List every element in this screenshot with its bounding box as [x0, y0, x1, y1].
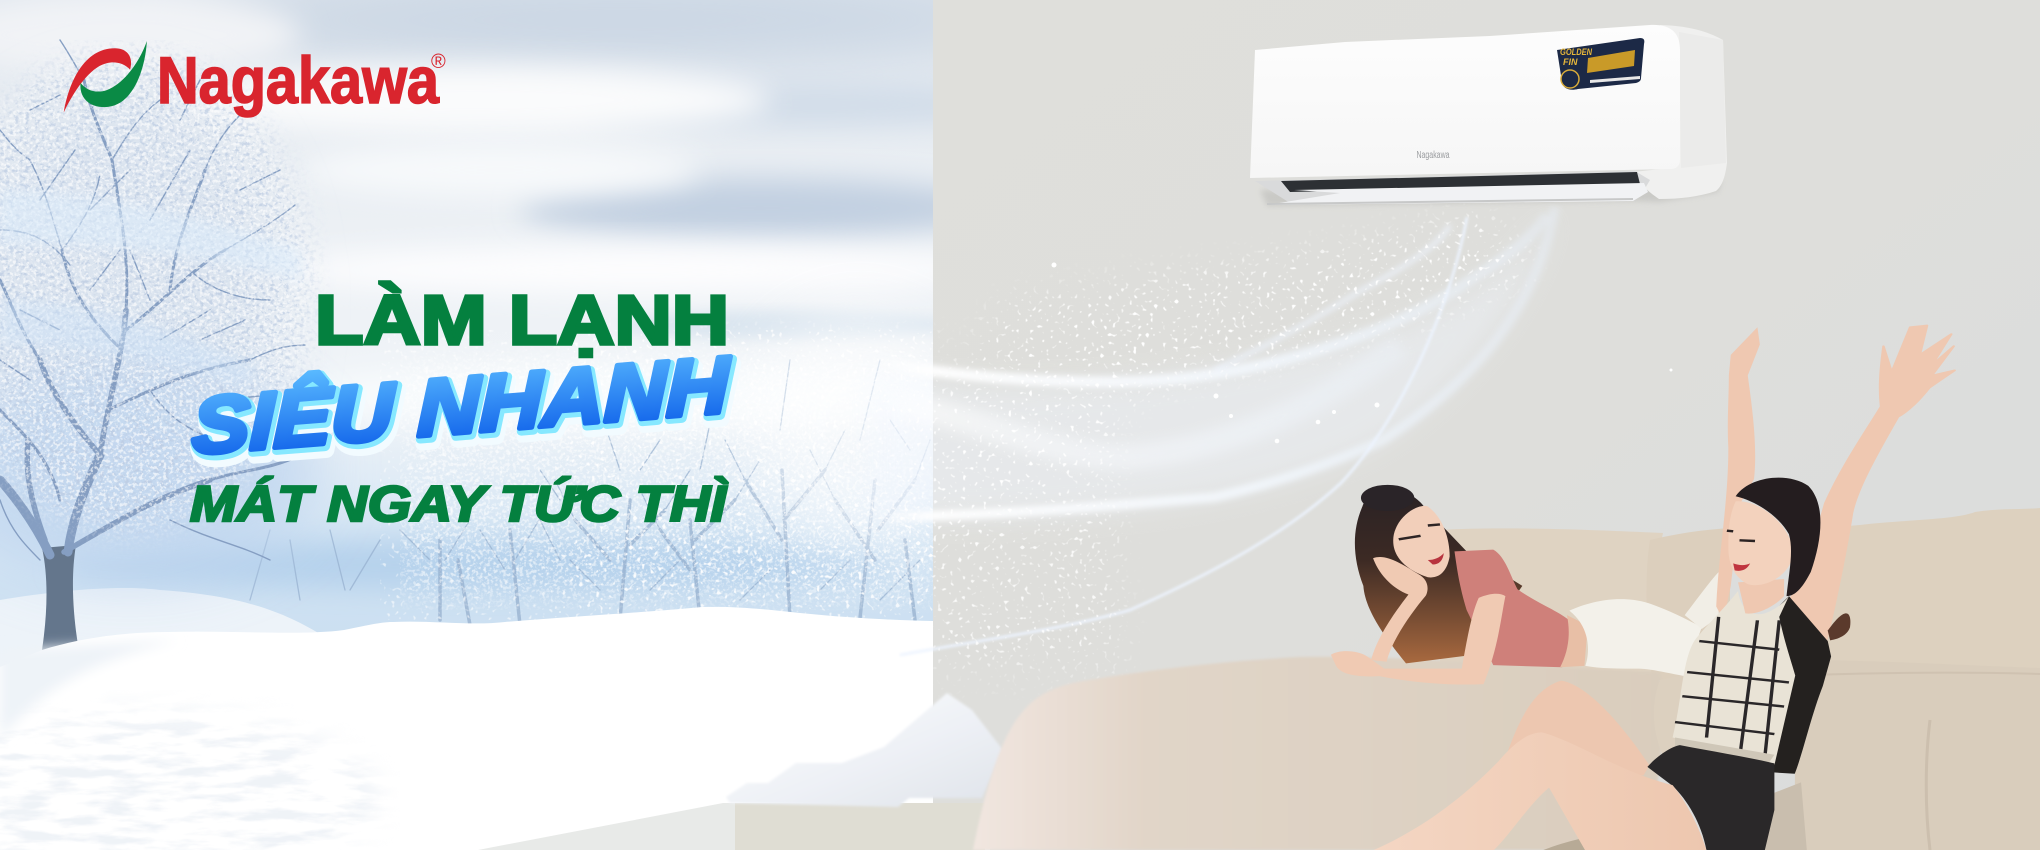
headline line 2: SIÊU NHANH — [192, 338, 731, 471]
logo wordmark: Nagakawa — [157, 43, 440, 117]
long hair — [1355, 490, 1522, 663]
clouds — [0, 0, 1060, 591]
pink shirt — [1454, 550, 1570, 667]
far tree frost — [400, 340, 933, 610]
face — [1393, 506, 1450, 577]
distant trees — [250, 360, 930, 625]
panel: living room wall — [933, 0, 2040, 850]
ac front panel — [1250, 25, 1680, 178]
sofa inner seat — [1654, 672, 1700, 790]
hair — [1736, 478, 1820, 596]
lower arm — [1331, 594, 1505, 685]
soft band between streams — [870, 207, 1555, 518]
golden fin sticker: FIN — [1563, 57, 1578, 67]
rear leg — [1505, 681, 1649, 789]
check lines — [1675, 617, 1789, 758]
headline line 3: MÁT NGAY TỨC THÌ — [190, 476, 728, 532]
golden fin sticker — [1557, 38, 1644, 90]
headline line 2: SIÊU NHANH — [196, 346, 735, 479]
snow particles — [560, 212, 1672, 679]
black back of top — [1765, 596, 1831, 774]
falling snow — [380, 330, 933, 620]
left arm — [1716, 327, 1760, 620]
neck — [1738, 579, 1784, 614]
air conditioner — [1250, 25, 1727, 206]
air flow swooshes — [870, 207, 1555, 655]
sofa back left — [1440, 528, 1663, 680]
ac brand: Nagakawa — [1416, 150, 1450, 161]
waistband — [1675, 738, 1774, 765]
rear snow bank — [0, 588, 317, 667]
front leg — [1372, 732, 1707, 850]
ac louver and vent — [1255, 171, 1650, 203]
panel: winter scene — [0, 0, 933, 850]
headline — [190, 281, 735, 532]
ac side and base — [1633, 25, 1727, 199]
registered mark: ® — [431, 51, 446, 73]
logo — [64, 41, 446, 117]
snow pile — [726, 693, 1003, 807]
hair bun — [1361, 485, 1414, 511]
sofa back middle — [1646, 528, 1730, 680]
right arm — [1784, 326, 1955, 662]
haze from airflow — [750, 310, 970, 550]
golden fin sticker: GOLDEN — [1560, 47, 1592, 57]
rear hair — [1828, 613, 1850, 640]
white shorts — [1569, 599, 1702, 676]
sofa — [973, 508, 2040, 850]
ac shadow — [1260, 180, 1722, 206]
checked top — [1673, 591, 1795, 765]
woman on sofa — [1331, 485, 1719, 685]
rug — [1542, 834, 1648, 850]
foreground tree — [0, 40, 330, 650]
face — [1728, 501, 1794, 585]
woman raising arms — [1372, 326, 1955, 850]
sofa seat left — [973, 657, 1663, 850]
sofa seat right — [1790, 660, 2040, 850]
headline line 1: LÀM LẠNH — [315, 281, 729, 359]
black shorts — [1647, 745, 1774, 850]
midriff — [1560, 615, 1588, 667]
raised leg — [1685, 572, 1719, 629]
logo mark — [64, 41, 147, 112]
floor — [478, 803, 990, 850]
hand and arm — [1371, 557, 1428, 662]
cushion — [1760, 782, 1807, 850]
sofa back right — [1800, 508, 2040, 672]
headline line 2: SIÊU NHANH — [194, 341, 733, 474]
snow ground — [0, 607, 933, 850]
